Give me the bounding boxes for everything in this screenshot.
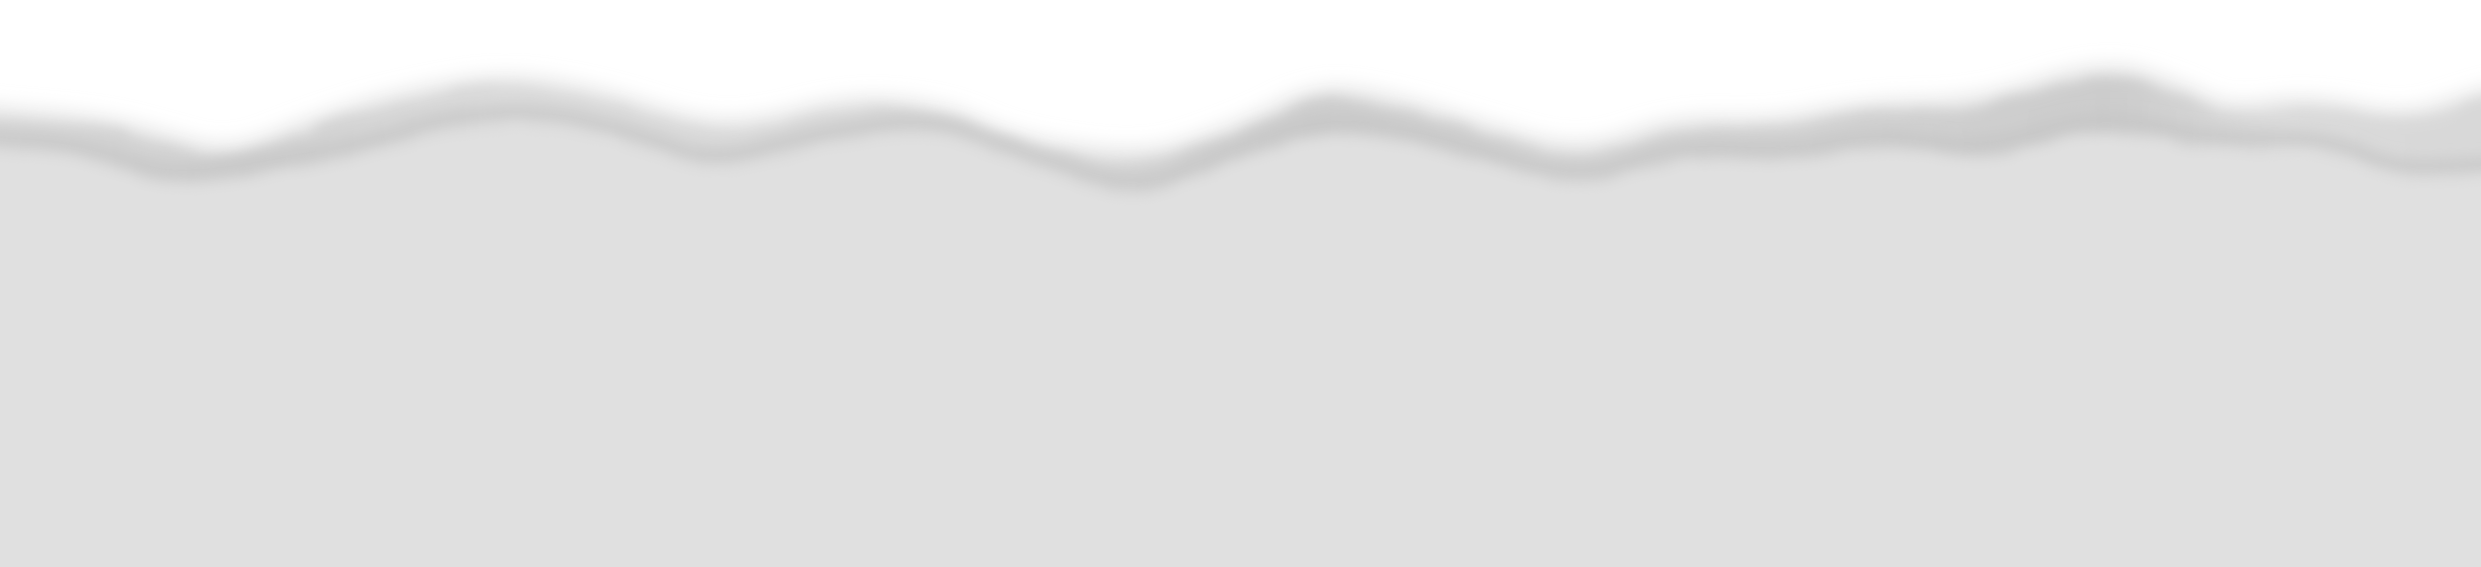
outer soft fade of the edge bbox=[0, 66, 2481, 397]
paper body lower fill bbox=[0, 250, 2481, 567]
grey shadow band bbox=[0, 78, 2481, 408]
dark core of band bbox=[0, 112, 2481, 180]
paper body bbox=[0, 126, 2481, 412]
